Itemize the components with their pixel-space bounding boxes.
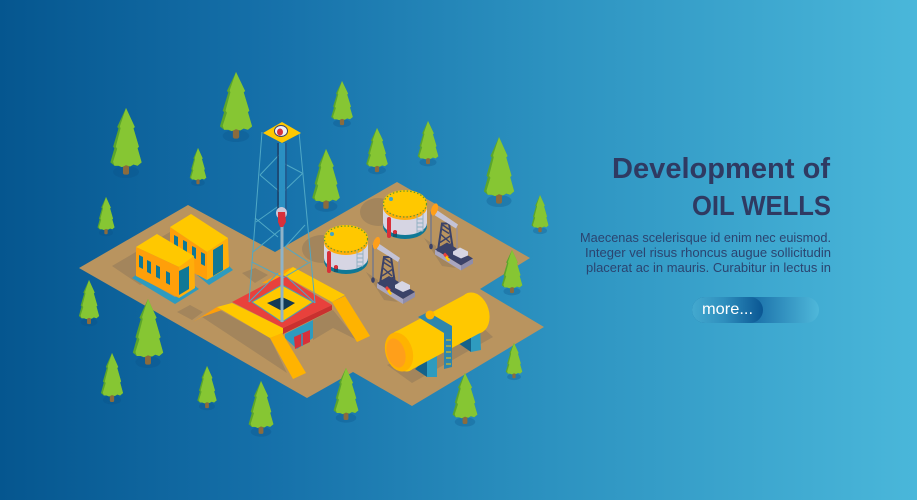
tree 17 (334, 368, 358, 423)
ground: oil field (79, 182, 544, 406)
more button: more... (702, 301, 753, 318)
ground shadows (112, 198, 493, 383)
body line 2: Integer vel risus rhoncus augue sollicitudin (585, 245, 831, 260)
tree 5 (366, 128, 388, 174)
tree 2 (331, 81, 353, 127)
building: back cabin (170, 214, 233, 285)
drilling rig (193, 122, 370, 379)
heading line 2: OIL WELLS (692, 190, 831, 221)
tree 11 (79, 280, 99, 326)
tank end cap (380, 329, 418, 375)
tree 1 (220, 72, 252, 142)
crown block (263, 122, 301, 143)
storage tank back (383, 190, 427, 239)
pump jack back (429, 203, 473, 270)
tree 16 (249, 381, 273, 437)
tree 12 (502, 250, 522, 295)
tank body (384, 289, 494, 375)
derrick tower (249, 132, 315, 322)
hook block (276, 207, 287, 227)
rig platform (232, 275, 332, 334)
tree 3 (110, 108, 142, 178)
tree 9 (97, 197, 115, 236)
horizontal fuel tank (380, 289, 494, 377)
tree 7 (312, 149, 340, 212)
body text (580, 230, 831, 275)
body line 1: Maecenas scelerisque id enim nec euismod. (580, 230, 831, 245)
tree 14 (101, 353, 123, 404)
more button (692, 297, 819, 323)
rig ramps (193, 267, 370, 379)
tree 15 (197, 366, 217, 410)
tree 4 (190, 148, 206, 186)
tree 13 (133, 299, 163, 368)
pump jack front (371, 236, 415, 304)
tree 8 (484, 137, 514, 207)
tree 10 (531, 195, 549, 234)
building: front cabin (132, 234, 199, 304)
heading line 1: Development of (612, 153, 830, 185)
storage tank front (324, 225, 368, 274)
tree 6 (418, 121, 438, 166)
rig base building (285, 320, 313, 349)
derrick cables (278, 143, 286, 322)
tank strap and ladder (418, 310, 452, 369)
tree 18 (453, 373, 477, 427)
tree 19 (506, 343, 522, 380)
heading (612, 153, 831, 221)
tank front support (415, 352, 437, 377)
tank rear support (458, 327, 481, 352)
body line 3: placerat ac in mauris. Curabitur in lectus in (586, 260, 831, 275)
